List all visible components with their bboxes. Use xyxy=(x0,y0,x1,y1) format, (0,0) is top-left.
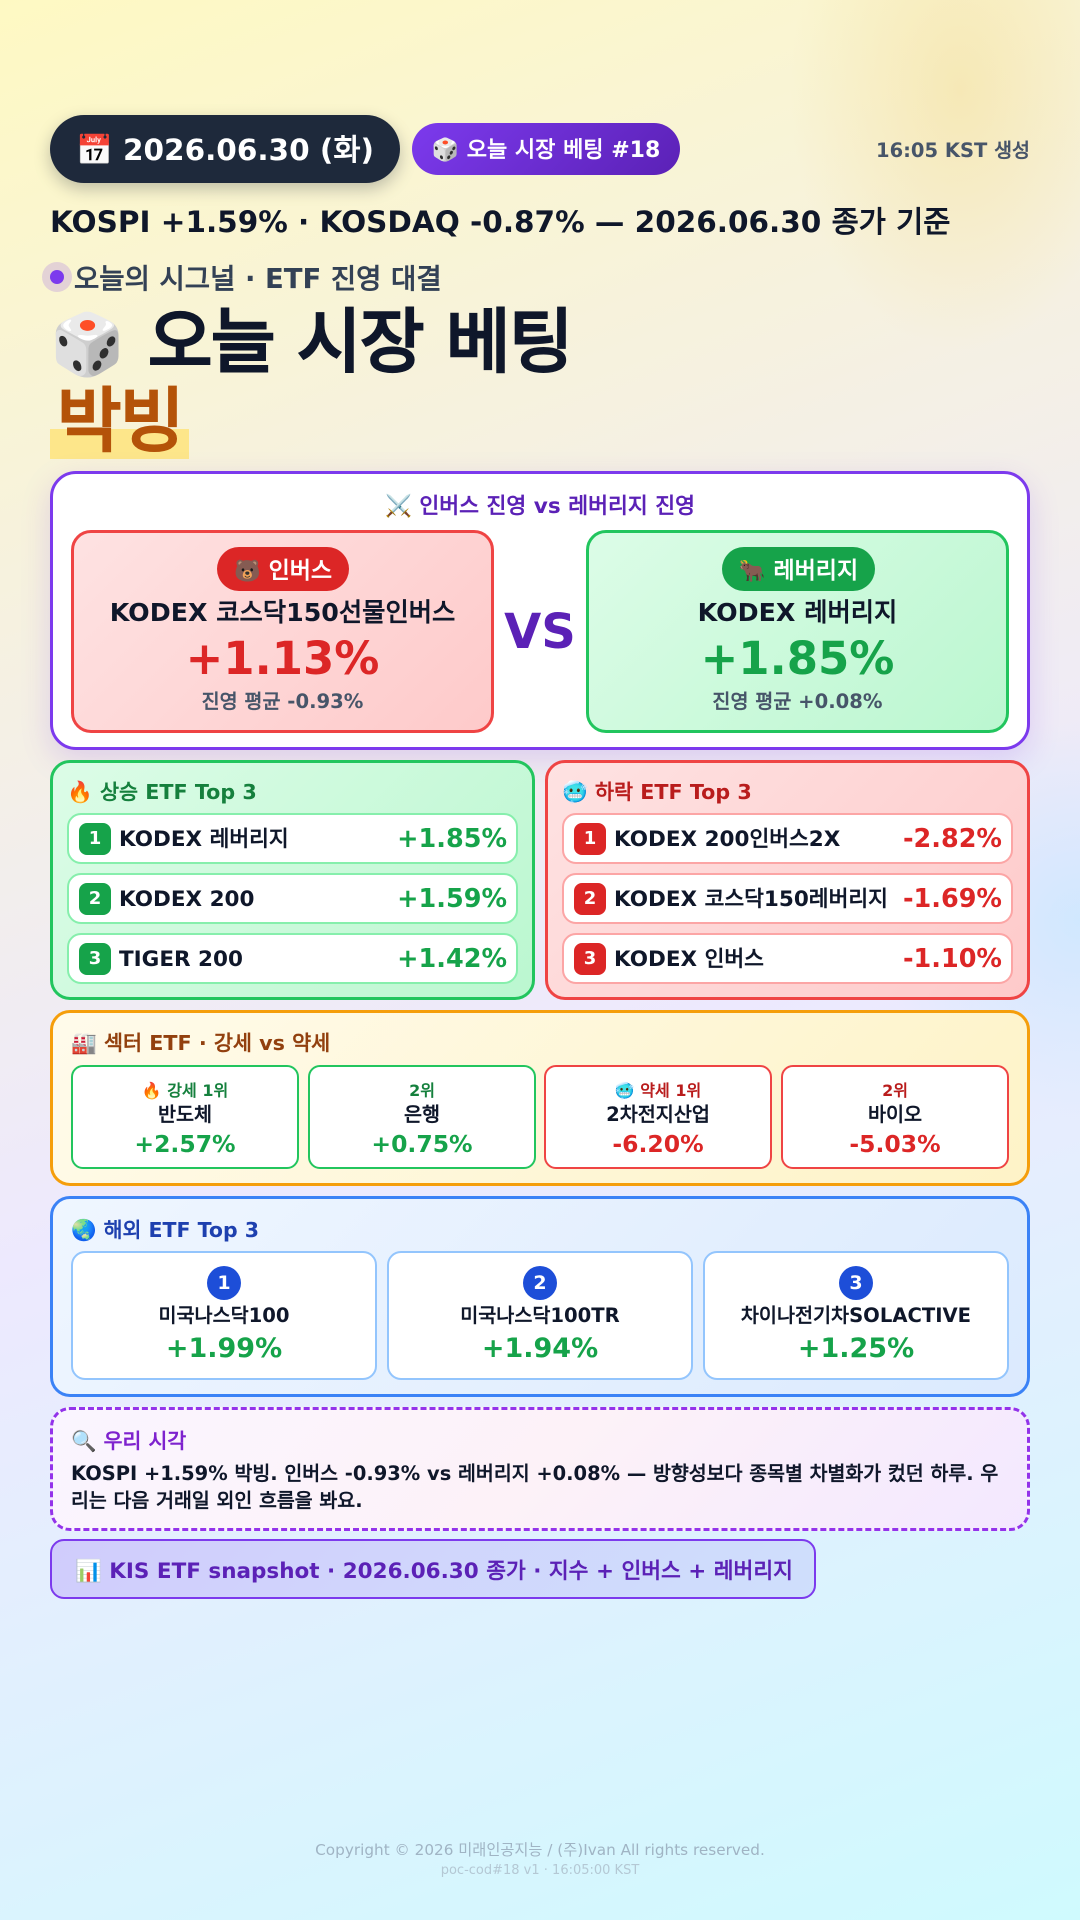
leverage percent: +1.85% xyxy=(701,632,894,685)
panel: overseas ETFs xyxy=(50,1196,1030,1397)
falling row 2: -1.69% xyxy=(903,884,1002,914)
copyright: Copyright © 2026 미래인공지능 / (주)Ivan All rights reserved. xyxy=(315,1841,765,1859)
falling heading: 🥶 하락 ETF Top 3 xyxy=(562,780,752,804)
panel: our view xyxy=(50,1407,1030,1531)
overseas card 2 xyxy=(387,1251,693,1380)
rising row 3: 3 xyxy=(89,948,101,969)
rising row 2: KODEX 200 xyxy=(119,887,254,912)
sector: bio: -5.03% xyxy=(849,1130,941,1158)
overseas heading: 🌏 해외 ETF Top 3 xyxy=(71,1218,259,1242)
panel: rising ETFs xyxy=(50,760,535,1000)
card: inverse xyxy=(71,530,494,733)
date pill: 📅 2026.06.30 (화) xyxy=(76,133,374,167)
falling row 2: KODEX 코스닥150레버리지 xyxy=(614,887,888,912)
snapshot note: 📊 KIS ETF snapshot · 2026.06.30 종가 · 지수 + 인버스 + 레버리지 xyxy=(75,1559,793,1584)
falling row 3: 3 xyxy=(584,948,596,969)
overseas card 3 xyxy=(703,1251,1009,1380)
sector: semiconductors: 🔥 강세 1위 xyxy=(142,1081,228,1100)
sector heading: 🏭 섹터 ETF · 강세 vs 약세 xyxy=(71,1031,330,1055)
our view body: 리는 다음 거래일 외인 흐름을 봐요. xyxy=(71,1489,363,1512)
sector: batteries: 2차전지산업 xyxy=(606,1103,710,1126)
our view heading: 🔍 우리 시각 xyxy=(71,1429,186,1453)
falling row 2: 2 xyxy=(584,888,596,909)
sector: banks xyxy=(308,1065,536,1169)
VS label: VS xyxy=(504,604,576,660)
index summary: KOSPI +1.59% · KOSDAQ -0.87% — 2026.06.30 종가 기준 xyxy=(50,205,950,239)
panel: sectors xyxy=(50,1010,1030,1186)
falling row 2 xyxy=(562,873,1013,924)
falling row 1: 1 xyxy=(584,828,596,849)
falling row 1 xyxy=(562,813,1013,864)
version line: poc-cod#18 v1 · 16:05:00 KST xyxy=(441,1863,639,1878)
rising row 2 xyxy=(67,873,518,924)
overseas card 1: 1 xyxy=(217,1272,231,1294)
sector: banks: 2위 xyxy=(409,1081,435,1100)
rising row 1: KODEX 레버리지 xyxy=(119,827,289,852)
inverse pill: 🐻 인버스 xyxy=(234,558,332,584)
eyebrow: 오늘의 시그널 · ETF 진영 대결 xyxy=(74,263,442,295)
overseas card 1 xyxy=(71,1251,377,1380)
rising row 1: +1.85% xyxy=(397,824,507,854)
inverse name: KODEX 코스닥150선물인버스 xyxy=(110,598,455,627)
panel: versus xyxy=(50,471,1030,750)
overseas card 3: 차이나전기차SOLACTIVE xyxy=(741,1304,971,1327)
badge: 오늘 시장 베팅: 🎲 오늘 시장 베팅 #18 xyxy=(432,138,660,163)
overseas card 1: 미국나스닥100 xyxy=(158,1304,290,1327)
highlight word: 박빙 xyxy=(57,380,183,462)
sector: banks: 은행 xyxy=(404,1103,440,1126)
signal dot xyxy=(42,262,72,292)
falling row 3 xyxy=(562,933,1013,984)
rising row 3: +1.42% xyxy=(397,944,507,974)
sector: batteries: -6.20% xyxy=(612,1130,704,1158)
rising row 1: 1 xyxy=(89,828,101,849)
falling row 1: -2.82% xyxy=(903,824,1002,854)
sector: semiconductors: +2.57% xyxy=(134,1130,236,1158)
overseas card 3: 3 xyxy=(849,1272,863,1294)
sector: bio: 2위 xyxy=(882,1081,908,1100)
leverage pill xyxy=(722,547,875,591)
inverse average: 진영 평균 -0.93% xyxy=(202,690,363,713)
rising row 3 xyxy=(67,933,518,984)
sector: bio: 바이오 xyxy=(868,1103,922,1126)
main title: 오늘 시장 베팅 xyxy=(148,301,572,383)
sector: banks: +0.75% xyxy=(371,1130,473,1158)
snapshot note xyxy=(50,1539,816,1599)
sector: bio xyxy=(781,1065,1009,1169)
overseas card 1: +1.99% xyxy=(166,1333,282,1364)
date pill xyxy=(50,115,400,183)
leverage pill: 🐂 레버리지 xyxy=(739,558,858,584)
overseas card 2: 2 xyxy=(533,1272,547,1294)
leverage name: KODEX 레버리지 xyxy=(698,598,897,627)
sector: semiconductors: 반도체 xyxy=(158,1103,212,1126)
our view body: KOSPI +1.59% 박빙. 인버스 -0.93% vs 레버리지 +0.08% — 방향성보다 종목별 차별화가 컸던 하루. 우 xyxy=(71,1462,998,1485)
falling row 3: -1.10% xyxy=(903,944,1002,974)
generated time: 16:05 KST 생성 xyxy=(876,139,1030,162)
sector: semiconductors xyxy=(71,1065,299,1169)
overseas card 2: 미국나스닥100TR xyxy=(460,1304,620,1327)
sector: batteries xyxy=(544,1065,772,1169)
rising row 2: +1.59% xyxy=(397,884,507,914)
our view body xyxy=(71,1462,998,1512)
rising heading: 🔥 상승 ETF Top 3 xyxy=(67,780,257,804)
falling row 3: KODEX 인버스 xyxy=(614,947,764,972)
sector: batteries: 🥶 약세 1위 xyxy=(615,1081,701,1100)
rising row 3: TIGER 200 xyxy=(119,947,243,972)
overseas card 2: +1.94% xyxy=(482,1333,598,1364)
rising row 2: 2 xyxy=(89,888,101,909)
rising row 1 xyxy=(67,813,518,864)
inverse pill xyxy=(217,547,349,591)
card: leverage xyxy=(586,530,1009,733)
panel: falling ETFs xyxy=(545,760,1030,1000)
leverage average: 진영 평균 +0.08% xyxy=(712,690,883,713)
inverse percent: +1.13% xyxy=(186,632,379,685)
versus heading: ⚔️ 인버스 진영 vs 레버리지 진영 xyxy=(385,494,695,519)
overseas card 3: +1.25% xyxy=(798,1333,914,1364)
badge: 오늘 시장 베팅 xyxy=(412,123,680,175)
main title: 🎲 xyxy=(50,310,125,380)
falling row 1: KODEX 200인버스2X xyxy=(614,827,840,852)
